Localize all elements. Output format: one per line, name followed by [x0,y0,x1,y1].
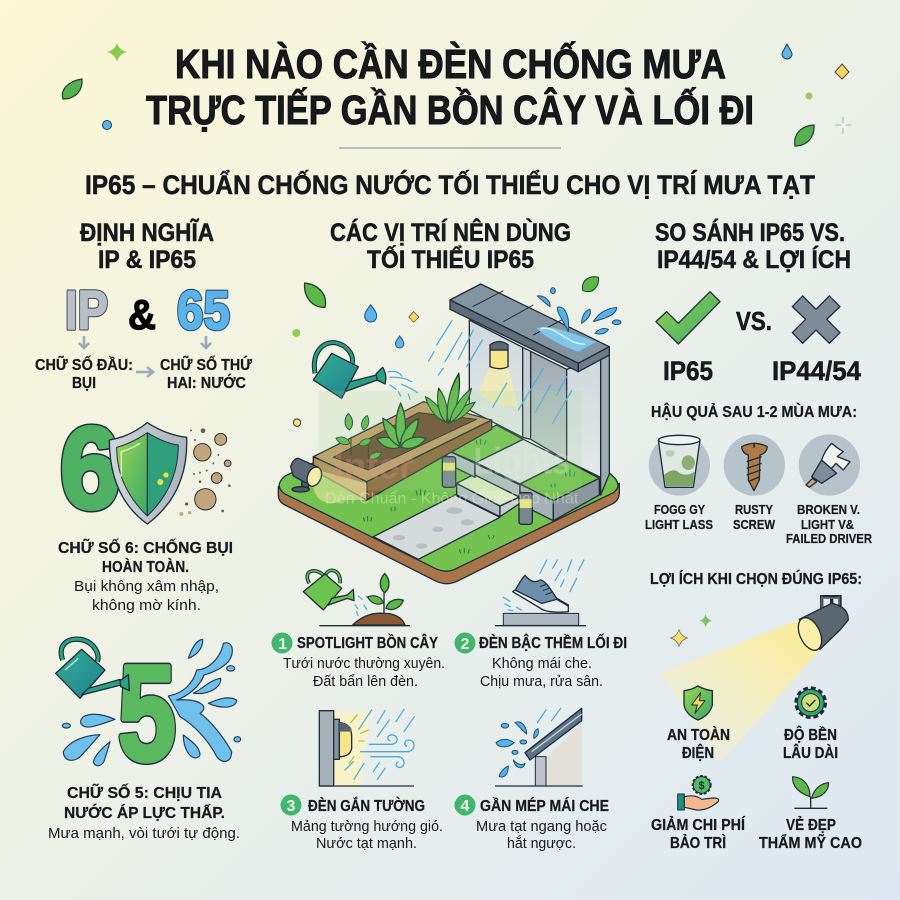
consequence: rusty screw: SCREW [733,517,776,532]
digit 5 text: NƯỚC ÁP LỰC THẤP. [64,804,225,822]
number 4: 4 [460,798,470,815]
consequence: rusty screw: RUSTY [735,502,773,517]
IP and 65 letters: IP [65,279,108,341]
watermark: Inter [333,445,413,486]
IP and 65 letters: IP [65,279,108,341]
text: roof edge: GẦN MÉP MÁI CHE [480,798,609,815]
benefit: aesthetics: VẺ ĐẸP [786,817,836,834]
text: step light: Chịu mưa, rửa sân. [480,674,603,690]
digit 5 text: Mưa mạnh, vòi tưới tự động. [48,826,240,842]
benefit: aesthetics [759,777,862,852]
heading: comparison: IP44/54 & LỢI ÍCH [657,245,851,274]
text: wall light: Mảng tường hướng gió. [291,819,443,835]
floating leaves and drops [292,272,603,426]
consequence: broken light: FAILED DRIVER [786,531,873,546]
consequence: foggy glass: FOGG GY [654,502,705,517]
text: spotlight: Đất bẩn lên đèn. [313,674,418,690]
benefit: safety: AN TOÀN [667,727,730,744]
label: IP44/54: IP44/54 [772,356,861,386]
benefit: safety: ĐIỆN [682,744,714,762]
panel: locations [272,217,627,852]
title: TRỰC TIẾP GẦN BỒN CÂY VÀ LỐI ĐI [146,87,754,133]
heading: locations [330,217,571,274]
digit 6 with shield: 6 [60,403,120,533]
number 3 [280,794,302,816]
walkway and steps [373,425,599,559]
benefit: maintenance cost: BẢO TRÌ [670,835,726,852]
first digit label: CHỮ SỐ ĐẦU: [35,356,133,374]
icon: check mark [656,292,720,344]
consequence: broken light: LIGHT V& [801,517,854,532]
item 2: step light [454,560,627,690]
heading: comparison [655,218,851,274]
splash on roof [537,288,621,334]
vs: VS. [736,306,772,336]
benefits heading: LỢI ÍCH KHI CHỌN ĐÚNG IP65: [650,570,862,588]
icon: shoe on step [495,560,586,626]
rain lines [429,321,572,423]
icon: cross [792,296,840,343]
digit 6 text: không mờ kính. [92,598,201,614]
isometric garden scene [278,272,621,584]
panel: comparison [645,218,873,852]
text: step light [479,634,627,690]
grass tufts [363,439,575,553]
consequences heading: HẬU QUẢ SAU 1-2 MÙA MƯA: [651,403,857,421]
digit 6 with shield: 6 [60,403,120,533]
digit 5 with watering can and splash: 5 [118,637,176,789]
digit 6 text: CHỮ SỐ 6: CHỐNG BỤI [58,539,233,557]
IP and 65 letters [65,279,230,341]
heading: definition: ĐỊNH NGHĨA [80,217,214,247]
watermark: Đèn Chuẩn - Không Gian Đẹp Nhất [325,490,579,507]
benefit: durability: ĐỘ BỀN [784,726,837,744]
digit 5 with watering can and splash: 5 [118,637,176,789]
IP and 65 letters: 65 [177,279,230,341]
text: roof edge [476,798,609,852]
heading: locations: CÁC VỊ TRÍ NÊN DÙNG [330,217,571,247]
watermark: Lights [473,440,570,481]
panel: definition [35,217,252,842]
benefit: safety [667,686,730,762]
subtitle: IP65 – CHUẨN CHỐNG NƯỚC TỐI THIỂU CHO VỊ TRÍ MƯA TẠT [85,168,815,200]
consequence: broken light: BROKEN V. [797,502,860,517]
text: roof edge: Mưa tạt ngang hoặc [476,819,607,835]
item 1: planter spotlight [272,570,445,690]
watering can [313,343,417,399]
number 2: 2 [460,636,470,653]
second digit label [160,356,252,392]
spotlight [291,458,367,503]
planter with plants [313,373,492,500]
number 2 [454,632,476,654]
number 1 [272,632,292,654]
bollard lights [442,457,532,524]
arrows [79,336,211,377]
title [146,41,754,133]
benefit: aesthetics: THẨM MỸ CAO [759,834,862,852]
benefit: durability [783,689,838,762]
consequence: foggy glass: LIGHT LASS [645,517,713,532]
icon: roof edge splash [495,708,583,786]
first digit label [35,356,133,392]
benefit: maintenance cost: GIẢM CHI PHÍ [651,817,746,834]
item 3: wall light [280,709,443,852]
benefit: maintenance cost [651,776,746,852]
second digit label: HAI: NƯỚC [167,374,246,392]
IP and 65 letters: 65 [177,279,230,341]
heading: locations: TỐI THIỂU IP65 [367,244,534,274]
number 3: 3 [286,798,296,815]
digit 5 text [48,784,240,842]
heading: definition: IP & IP65 [98,246,196,274]
text: roof edge: hắt ngược. [507,835,576,852]
number 4 [454,794,476,816]
title: KHI NÀO CẦN ĐÈN CHỐNG MƯA [175,41,726,87]
IP and 65 letters: & [128,291,156,338]
text: spotlight: SPOTLIGHT BỒN CÂY [297,634,439,652]
item 4: roof edge [454,708,609,852]
text: wall light: Nước tạt mạnh. [316,836,417,852]
text: spotlight: Tưới nước thường xuyên. [283,656,445,672]
digit 6 with shield [60,403,231,533]
consequence: rusty screw [724,434,785,532]
number 1: 1 [278,636,287,653]
digit 5 with watering can and splash [56,637,241,789]
label: IP65: IP65 [663,356,713,386]
icon: watering can and seedling [303,570,410,626]
second digit label: CHỮ SỐ THỨ [160,356,252,374]
first digit label: BỤI [72,375,96,392]
icon: wall lamp with wind [319,709,414,787]
heading: definition [80,217,214,274]
watermark [318,391,582,507]
heading: comparison: SO SÁNH IP65 VS. [655,218,845,247]
digit 6 text: Bụi không xâm nhập, [74,579,219,595]
consequence: broken light [786,434,873,546]
base platform [278,437,619,584]
benefit: maintenance cost: $ [699,780,705,792]
wall lamp [478,341,518,407]
wall with roof [450,284,609,495]
benefit: durability: LÂU DÀI [783,744,838,762]
consequence: foggy glass [645,434,713,532]
text: wall light [291,797,443,852]
text: wall light: ĐÈN GẮN TƯỜNG [308,797,425,815]
text: step light: Không mái che. [492,656,592,672]
text: step light: ĐÈN BẬC THỀM LỐI ĐI [479,634,627,652]
text: spotlight [283,634,445,690]
digit 6 text [58,539,233,614]
digit 5 text: CHỮ SỐ 5: CHỊU TIA [67,784,222,802]
digit 6 text: HOÀN TOÀN. [102,559,189,576]
decorative icons: top [62,43,851,146]
benefits spotlight [660,597,848,763]
